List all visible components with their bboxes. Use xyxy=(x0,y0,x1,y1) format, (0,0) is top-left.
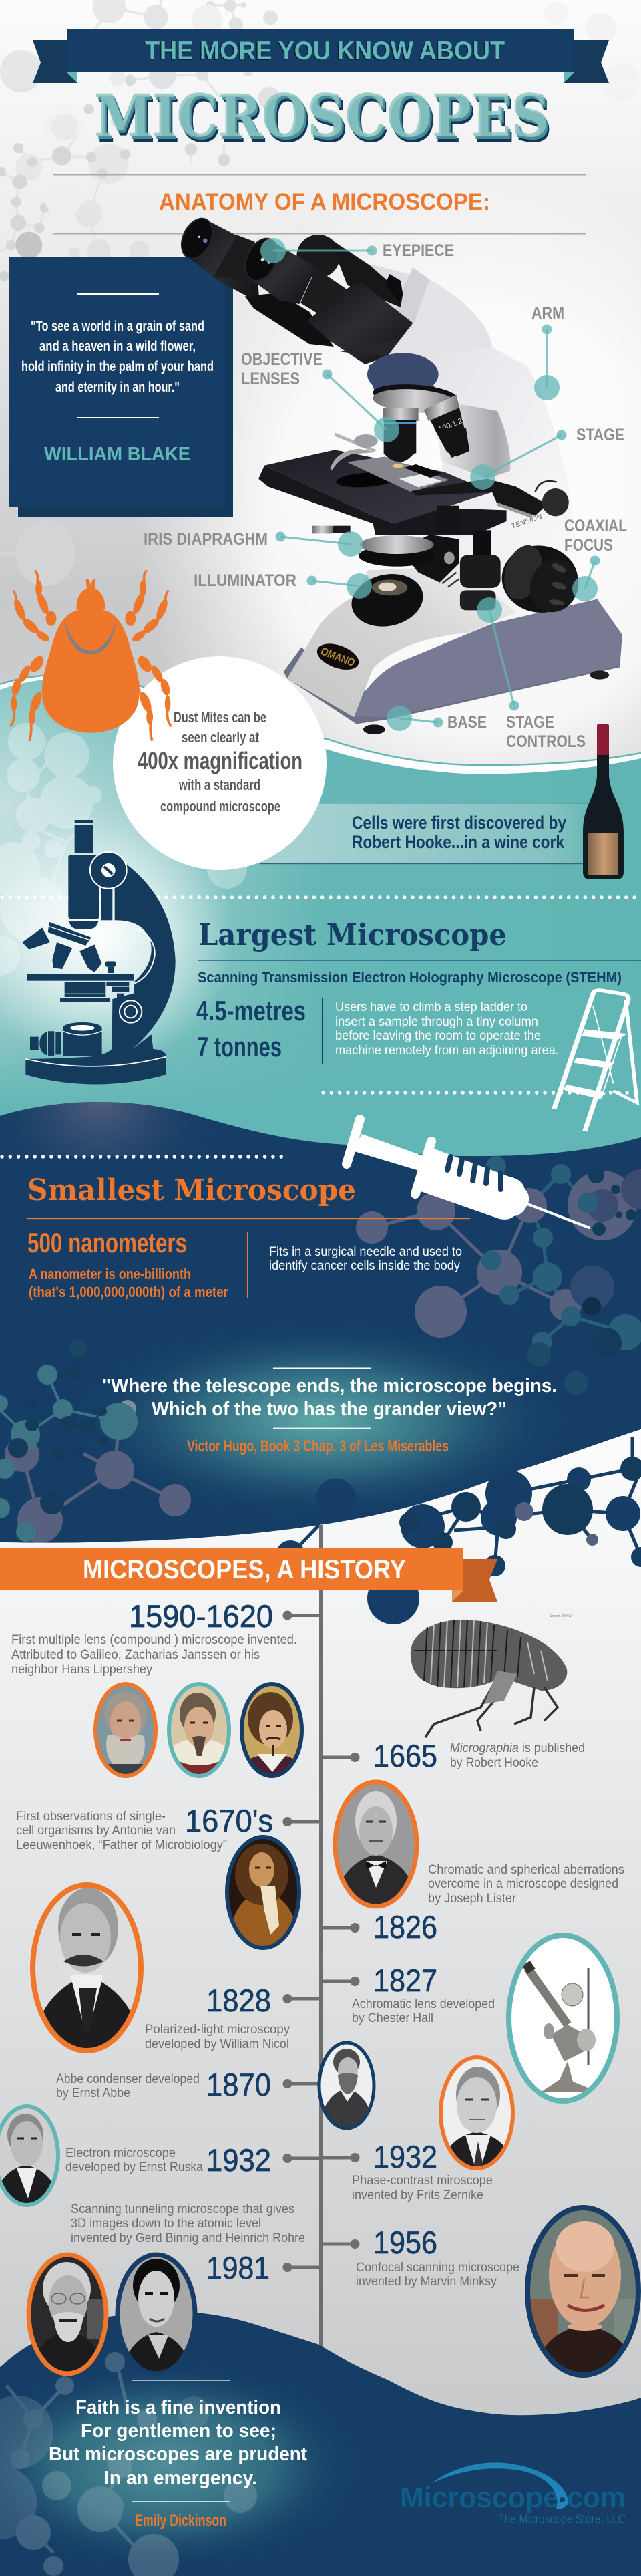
housing xyxy=(287,566,516,717)
portrait: Janssen xyxy=(167,1681,231,1781)
title: MICROSCOPES: MICROSCOPES xyxy=(94,81,549,150)
portrait: Binnig xyxy=(25,2252,114,2379)
heading: anatomy: ANATOMY OF A MICROSCOPE: xyxy=(159,189,490,215)
entry: 1828: Polarized-light microscopy xyxy=(145,2023,290,2037)
entry: 1590-1620 xyxy=(11,1598,297,1677)
quote: Victor Hugo: Victor Hugo, Book 3 Chap. 3 of Les Miserables xyxy=(187,1437,449,1455)
arm xyxy=(369,264,576,641)
entry: 1665: by Robert Hooke xyxy=(450,1756,538,1770)
entry: 1932 left: developed by Ernst Ruska xyxy=(65,2160,203,2174)
closing molecules xyxy=(0,2352,257,2576)
quote text: "To see a world in a grain of sand xyxy=(31,319,204,334)
background: top molecules xyxy=(0,0,640,281)
entry: 1827 xyxy=(352,1963,495,2025)
quote: Emily Dickinson: Emily Dickinson xyxy=(135,2511,226,2530)
entry: 1670's: Leeuwenhoek, “Father of Microbiology” xyxy=(16,1838,227,1852)
entry: 1870: 1870 xyxy=(206,2067,271,2102)
entry: 1981: invented by Gerd Binnig and Heinrich Rohre xyxy=(71,2231,305,2245)
callout: coaxial focus: COAXIAL xyxy=(564,517,627,535)
stats: largest: 7 tonnes xyxy=(197,1031,282,1062)
stats: smallest: (that's 1,000,000,000th) of a meter xyxy=(29,1284,228,1300)
entry: 1665 xyxy=(373,1738,585,1773)
entry: 1826: by Joseph Lister xyxy=(428,1892,517,1906)
callout: stage: STAGE xyxy=(576,426,624,444)
entry: 1932 left: Electron microscope xyxy=(65,2146,176,2160)
quote author: WILLIAM BLAKE xyxy=(44,444,190,465)
white circle: dust mites: with a standard xyxy=(178,776,260,793)
shaded inner arm xyxy=(439,404,510,478)
illustration: flea engraving xyxy=(411,1614,572,1737)
text: surgical needle: identify cancer cells inside the body xyxy=(269,1259,460,1273)
lamp xyxy=(345,567,429,633)
engraving: antique microscope xyxy=(509,1935,617,2101)
callout: stage xyxy=(470,426,624,490)
text: ladder description: before leaving the room to operate the xyxy=(335,1029,541,1043)
entry: 1827: Achromatic lens developed xyxy=(352,1997,495,2011)
entry: 1670's: First observations of single- xyxy=(16,1810,166,1824)
entry: 1981 xyxy=(71,2202,305,2285)
portrait: Rohrer xyxy=(115,2252,198,2371)
condenser xyxy=(399,535,459,583)
quote: Victor Hugo: "Where the telescope ends, the microscope begins. xyxy=(102,1375,557,1397)
closing wave panel xyxy=(0,2312,641,2576)
quote: Emily Dickinson: But microscopes are prudent xyxy=(49,2444,307,2465)
callout: eyepiece xyxy=(260,238,454,263)
callout: objective lenses xyxy=(241,350,399,442)
quote text xyxy=(21,319,214,395)
heading: largest microscope: Largest Microscope xyxy=(198,918,507,952)
entry: 1932 right: invented by Frits Zernike xyxy=(352,2188,483,2202)
entry: 1932 left xyxy=(65,2142,271,2178)
background: upper grey gradient xyxy=(0,0,641,869)
nosepiece xyxy=(367,353,469,462)
icon: wine bottle xyxy=(583,724,624,879)
stats: smallest: 500 nanometers xyxy=(27,1227,187,1258)
timeline stubs xyxy=(283,1610,359,2272)
eyepieces xyxy=(176,213,413,364)
callout: iris diaphragm xyxy=(144,530,363,557)
entry: 1826 xyxy=(373,1863,624,1945)
quote text: hold infinity in the palm of your hand xyxy=(21,359,214,374)
heading: smallest microscope: Smallest Microscope xyxy=(27,1173,356,1207)
entry: 1826: 1826 xyxy=(373,1909,437,1945)
entry: 1932 right: Phase-contrast miroscope xyxy=(352,2174,493,2188)
text: surgical needle xyxy=(269,1245,462,1273)
entry: 1590-1620: Attributed to Galileo, Zacharias Janssen or his xyxy=(11,1648,260,1662)
timeline spine xyxy=(319,1525,323,2347)
icon: step ladder xyxy=(554,990,637,1131)
navy molecules at wave edge xyxy=(276,1437,641,1624)
lower background xyxy=(0,1429,641,2432)
portrait: Abbe xyxy=(317,2041,376,2132)
callout: arm: ARM xyxy=(531,304,564,323)
callout: objective lenses: OBJECTIVE xyxy=(241,350,323,369)
mechanical stage xyxy=(411,479,547,516)
stats: largest xyxy=(196,995,306,1062)
dotted rule 3 xyxy=(2,1155,288,1159)
teal section molecules xyxy=(0,723,247,976)
dotted rule 1 xyxy=(2,895,641,899)
entry: 1665: Micrographia is published xyxy=(450,1741,585,1755)
entry: 1827: 1827 xyxy=(373,1963,437,1998)
callout: stage controls: STAGE xyxy=(506,713,554,732)
entry: 1828 xyxy=(145,1983,290,2051)
callout: stage controls xyxy=(477,597,586,751)
cells text: Robert Hooke...in a wine cork xyxy=(352,832,565,852)
quote text: and a heaven in a wild flower, xyxy=(39,339,196,354)
portrait: Ruska xyxy=(0,2105,63,2208)
portrait: Minsky xyxy=(524,2205,641,2379)
white circle: dust mites: Dust Mites can be xyxy=(174,709,266,726)
callout: illuminator: ILLUMINATOR xyxy=(194,571,296,590)
entry: 1826: overcome in a microscope designed xyxy=(428,1877,618,1891)
portrait: Zernike xyxy=(437,2055,517,2175)
base plate xyxy=(284,599,622,724)
entry: 1981: 3D images down to the atomic level xyxy=(71,2216,261,2231)
icon: dust mite xyxy=(10,570,172,741)
portrait: Nicol xyxy=(30,1881,144,2055)
quote: Emily Dickinson: For gentlemen to see; xyxy=(81,2420,276,2442)
entry: 1590-1620: First multiple lens (compound ) microscope invented. xyxy=(11,1633,297,1647)
quote text: and eternity in an hour." xyxy=(55,380,180,395)
text: ladder description: machine remotely from an adjoining area. xyxy=(335,1044,559,1058)
entry: 1828: developed by William Nicol xyxy=(145,2037,289,2051)
text: ladder description xyxy=(335,1000,559,1058)
cells text xyxy=(352,813,566,852)
logo: Microscope.com: Microscope com xyxy=(400,2482,626,2514)
entry: 1590-1620: 1590-1620 xyxy=(129,1598,273,1634)
entry: 1670's: cell organisms by Antonie van xyxy=(16,1824,176,1838)
dotted rule 2 xyxy=(323,1091,641,1095)
entry: 1826: Chromatic and spherical aberrations xyxy=(428,1863,624,1877)
white circle: dust mites xyxy=(113,656,327,870)
dark wave panel xyxy=(0,1102,641,1543)
base: TENSION xyxy=(511,513,544,530)
icon: microscope silhouette xyxy=(22,820,176,1084)
stats: smallest: A nanometer is one-billionth xyxy=(29,1266,191,1282)
icon: syringe xyxy=(347,1119,589,1228)
entry: 1932 left: 1932 xyxy=(206,2142,271,2178)
callout: stage controls: CONTROLS xyxy=(506,732,586,751)
title: MICROSCOPES: MICROSCOPES xyxy=(96,84,551,153)
callout: base: BASE xyxy=(447,713,487,732)
callout: base xyxy=(387,706,487,732)
callout: coaxial focus: FOCUS xyxy=(564,536,613,555)
badge: OMANO: OMANO xyxy=(318,645,357,669)
faint circle by the mite xyxy=(0,521,75,586)
entry: 1932 right: 1932 xyxy=(373,2139,437,2174)
entry: 1870 xyxy=(56,2067,271,2102)
entry: 1956: 1956 xyxy=(373,2225,437,2260)
banner: history xyxy=(0,1548,497,1602)
stage xyxy=(258,466,507,535)
dark panel molecules: left xyxy=(0,1339,191,1543)
text: surgical needle: Fits in a surgical needle and used to xyxy=(269,1245,462,1259)
callout: iris diaphragm: IRIS DIAPRAGHM xyxy=(144,530,268,549)
entry: 1870: by Ernst Abbe xyxy=(56,2086,130,2100)
focus xyxy=(473,530,491,559)
title line: THE MORE YOU KNOW ABOUT xyxy=(145,37,505,65)
quote: Emily Dickinson: Faith is a fine invention xyxy=(75,2397,281,2418)
base xyxy=(258,428,622,734)
entry: 1670's: 1670's xyxy=(185,1803,273,1838)
ribbon main xyxy=(67,29,574,72)
title line: THE MORE YOU KNOW ABOUT xyxy=(144,37,504,66)
callout: objective lenses: LENSES xyxy=(241,370,300,388)
entry: 1932 right xyxy=(352,2139,493,2202)
text: ladder description: Users have to climb a step ladder to xyxy=(335,1000,527,1014)
entry: 1956: invented by Marvin Minksy xyxy=(356,2275,497,2289)
entry: 1956: Confocal scanning microscope xyxy=(356,2261,519,2275)
stats: smallest xyxy=(27,1227,228,1300)
microscope photo xyxy=(176,213,622,734)
stats: largest: 4.5-metres xyxy=(196,995,306,1026)
panel: William Blake quote xyxy=(9,257,233,517)
portrait: Leeuwenhoek xyxy=(224,1834,304,1951)
teal wave section xyxy=(0,675,641,1163)
entry: 1665: 1665 xyxy=(373,1738,437,1773)
entry: 1956 xyxy=(356,2225,519,2289)
cells text: Cells were first discovered by xyxy=(352,813,566,833)
cells band xyxy=(260,803,601,864)
logo: Microscope.com xyxy=(400,2462,626,2527)
dark panel molecules: right xyxy=(356,1156,641,1395)
callout: illuminator xyxy=(194,571,372,599)
badge: OMANO xyxy=(313,639,363,675)
entry: 1870: Abbe condenser developed xyxy=(56,2072,200,2086)
white circle: dust mites: seen clearly at xyxy=(182,729,260,746)
callout: coaxial focus xyxy=(564,517,627,601)
head xyxy=(384,279,492,361)
white circle: dust mites: 400x magnification xyxy=(138,747,302,774)
quote: Victor Hugo: Which of the two has the grander view?” xyxy=(152,1399,507,1420)
quote: Emily Dickinson: In an emergency. xyxy=(104,2468,257,2489)
banner: history: MICROSCOPES, A HISTORY xyxy=(83,1555,406,1584)
entry: 1590-1620: neighbor Hans Lippershey xyxy=(11,1663,152,1677)
nosepiece: 100/1.25 xyxy=(437,416,467,434)
icon glow xyxy=(0,802,234,1069)
quote: Emily Dickinson xyxy=(49,2380,307,2530)
entry: 1828: 1828 xyxy=(206,1983,271,2018)
callout: eyepiece: EYEPIECE xyxy=(383,241,454,260)
white circle: dust mites: compound microscope xyxy=(160,798,280,815)
ribbon banner xyxy=(33,29,609,83)
entry: 1670's xyxy=(16,1803,273,1852)
entry: 1981: Scanning tunneling microscope that gives xyxy=(71,2202,294,2216)
title: MICROSCOPES: MICROSCOPES xyxy=(97,86,552,156)
entry: 1981: 1981 xyxy=(206,2250,270,2285)
ribbon tails xyxy=(33,40,609,83)
callout: arm xyxy=(531,304,564,400)
portrait: Galileo xyxy=(93,1681,158,1784)
text: ladder description: insert a sample through a tiny column xyxy=(335,1015,538,1029)
entry: 1827: by Chester Hall xyxy=(352,2011,433,2025)
callouts and labels xyxy=(144,238,627,751)
portrait: Lister xyxy=(331,1777,421,1911)
portrait: Lippershey xyxy=(240,1681,304,1781)
illustration: flea engraving: Schem. XXXIV xyxy=(550,1614,572,1618)
quote: Victor Hugo xyxy=(102,1367,557,1455)
